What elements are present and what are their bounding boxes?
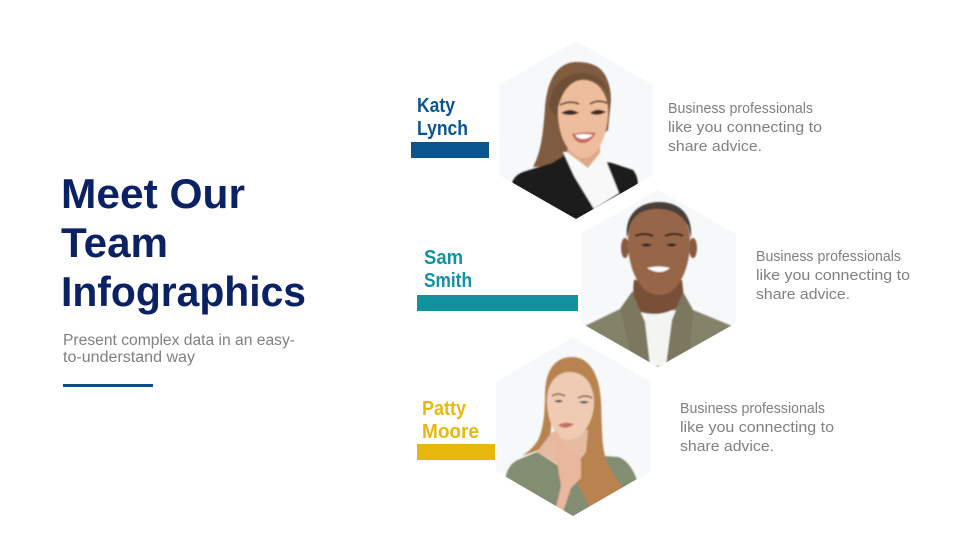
name: Patty Moore: Moore xyxy=(422,421,479,443)
description: Sam: like you connecting to xyxy=(756,267,910,284)
description: Patty: Business professionals xyxy=(680,400,825,417)
name bar: Katy xyxy=(411,142,489,158)
panel: Katy Lynch xyxy=(411,38,822,223)
description: Sam xyxy=(756,248,910,303)
description: Katy: Business professionals xyxy=(668,100,813,117)
title: Team xyxy=(61,219,168,266)
portrait: Katy Lynch xyxy=(495,38,657,223)
description: Katy: share advice. xyxy=(668,138,762,155)
name: Katy Lynch xyxy=(417,95,468,140)
description: Patty: share advice. xyxy=(680,438,774,455)
name: Patty Moore xyxy=(422,398,479,443)
name: Katy Lynch: Lynch xyxy=(417,118,468,140)
title: Meet Our xyxy=(61,170,245,217)
title underline xyxy=(63,384,153,387)
name: Sam Smith: Smith xyxy=(424,270,472,292)
subtitle: Present complex data in an easy- xyxy=(63,332,295,349)
subtitle: to-understand way xyxy=(63,349,195,366)
description: Patty xyxy=(680,400,834,455)
title xyxy=(61,170,306,315)
panel: Sam Smith xyxy=(417,187,910,372)
portrait: Patty Moore xyxy=(493,334,654,519)
panel: Patty Moore xyxy=(417,334,834,519)
name: Katy Lynch: Katy xyxy=(417,95,456,117)
subtitle xyxy=(63,332,295,366)
name bar: Patty xyxy=(417,444,495,460)
title: Infographics xyxy=(61,268,306,315)
description: Katy xyxy=(668,100,822,155)
description: Patty: like you connecting to xyxy=(680,419,834,436)
description: Katy: like you connecting to xyxy=(668,119,822,136)
name: Patty Moore: Patty xyxy=(422,398,467,420)
name: Sam Smith: Sam xyxy=(424,247,463,269)
description: Sam: Business professionals xyxy=(756,248,901,265)
description: Sam: share advice. xyxy=(756,286,850,303)
name bar: Sam xyxy=(417,295,578,311)
portrait: Sam Smith xyxy=(578,187,740,372)
name: Sam Smith xyxy=(424,247,472,292)
